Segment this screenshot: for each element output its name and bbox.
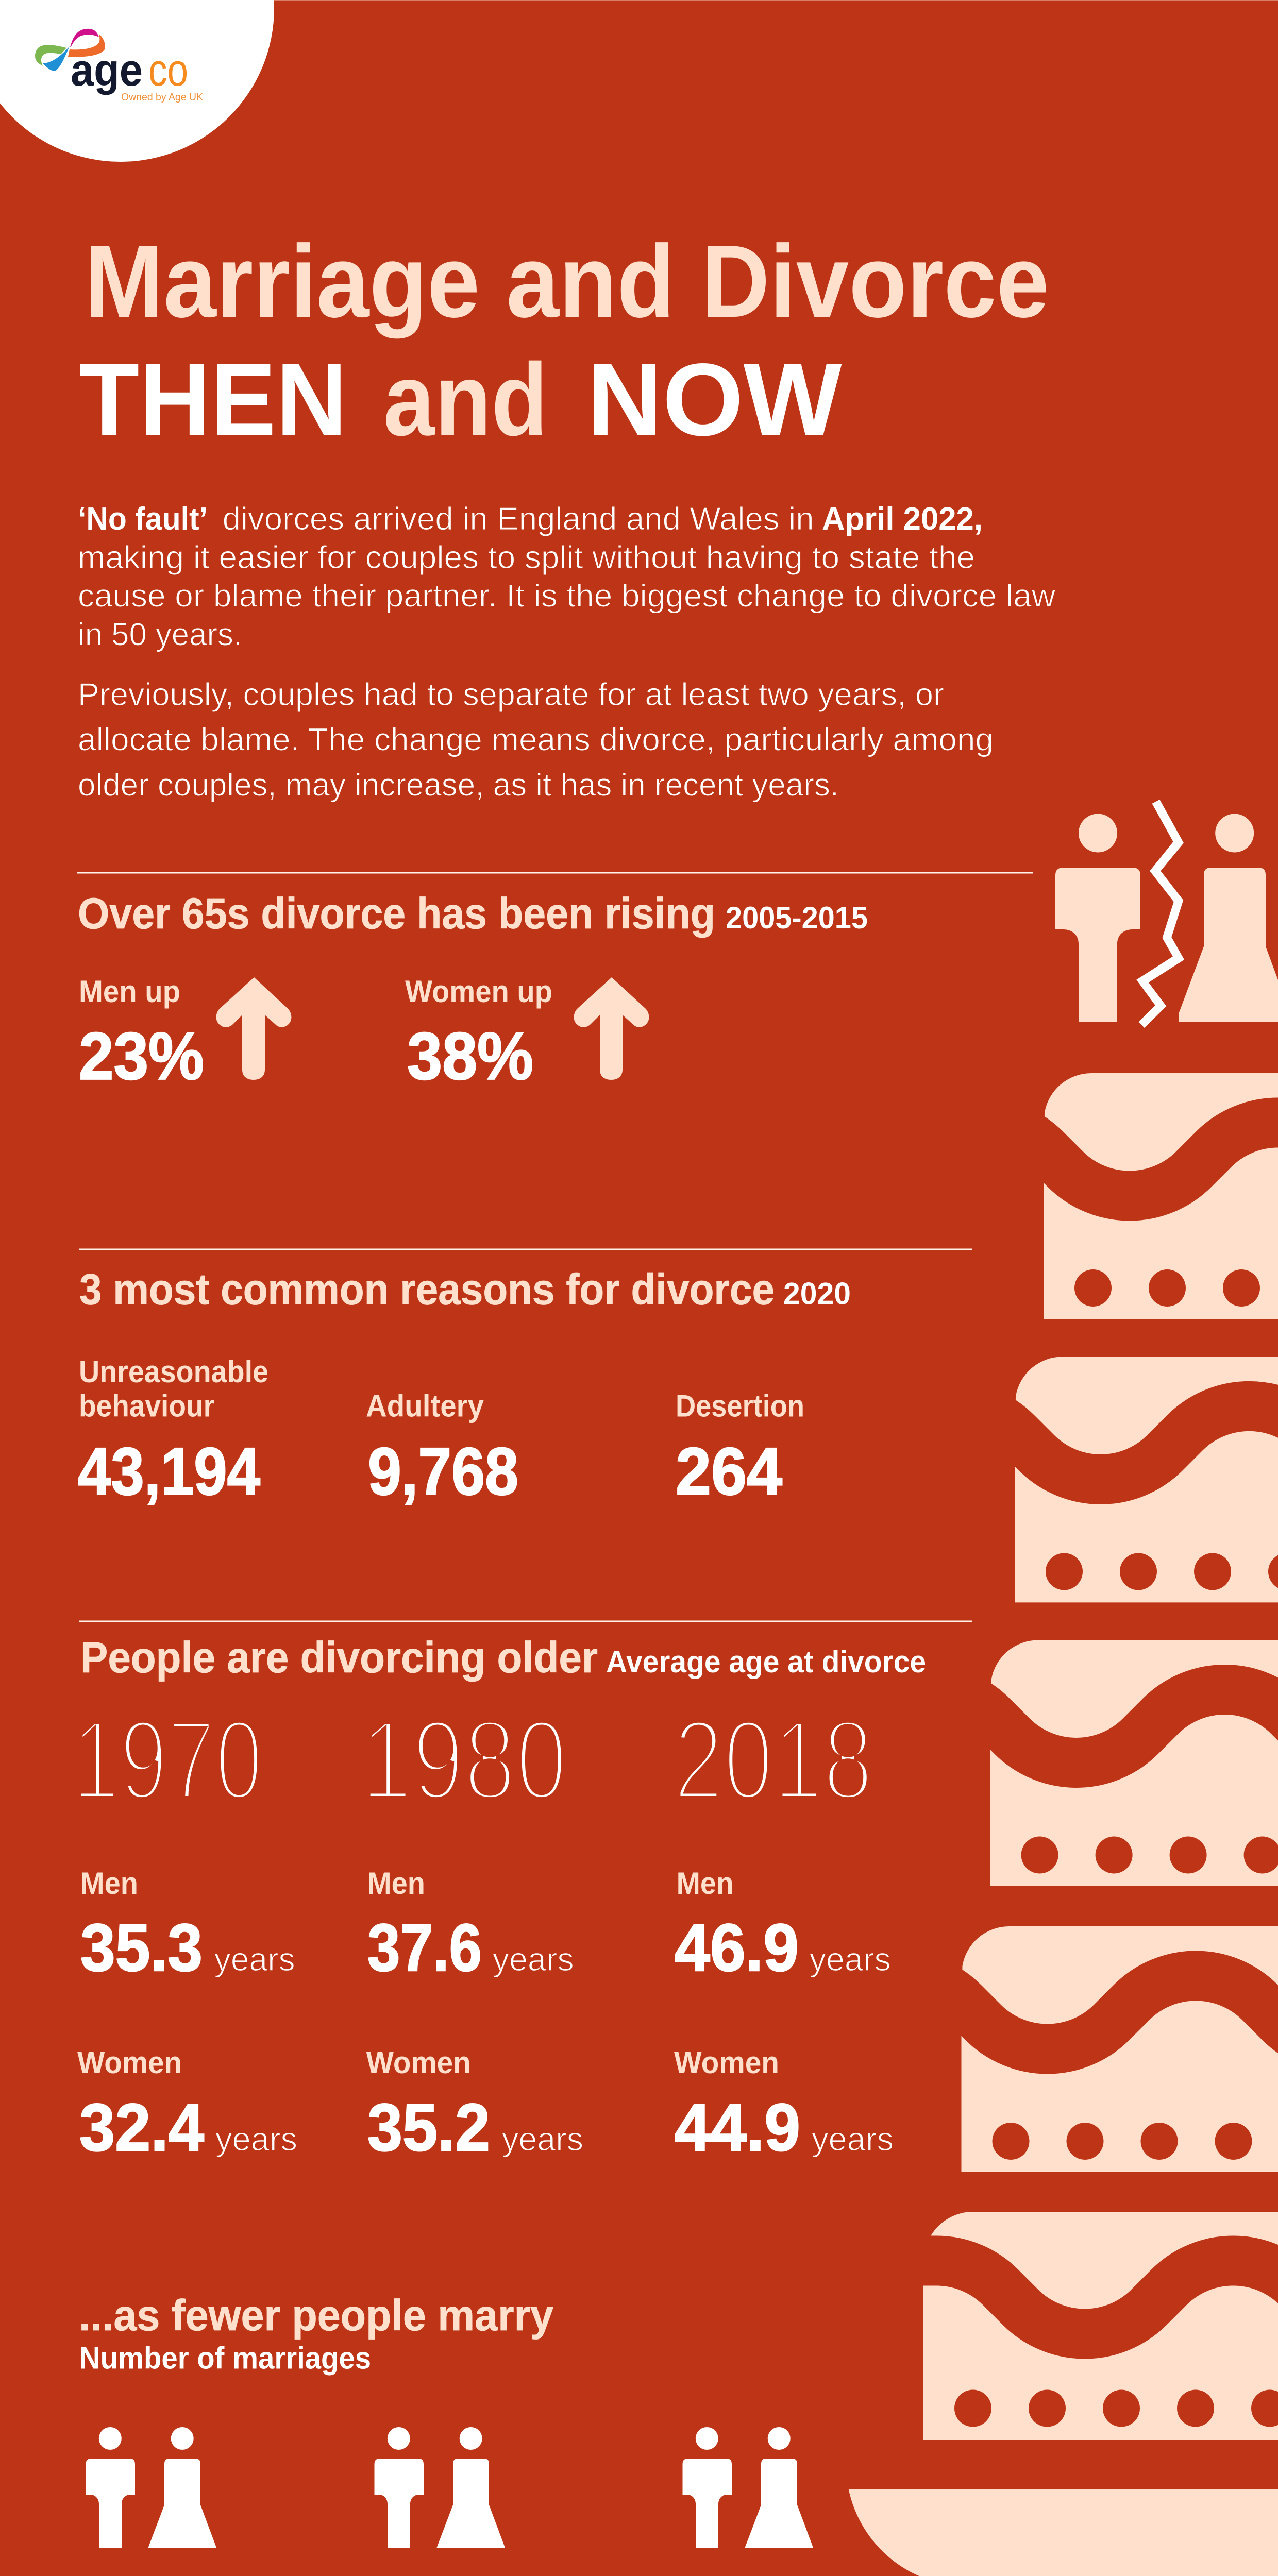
column: 1970: years — [214, 1941, 295, 1978]
intro text: no fault divorces: in 50 years. — [78, 617, 242, 652]
stat: desertion — [676, 1389, 804, 1509]
stat: adultery — [366, 1389, 518, 1509]
stat: adultery: 9,768 — [368, 1434, 518, 1509]
stat: unreasonable behaviour: behaviour — [79, 1389, 214, 1423]
intro text: no fault divorces: cause or blame their partner. It is the biggest change to divorce law — [78, 578, 1055, 614]
stat: desertion: 264 — [676, 1434, 782, 1509]
icon: woman — [1179, 814, 1278, 1022]
arrow up: men — [216, 977, 291, 1080]
column: 2018: 2018 — [674, 1696, 873, 1823]
panel: over 65s divorce rising — [78, 889, 868, 1094]
column: 2018: years — [812, 2121, 894, 2158]
column: 2018: Men — [677, 1866, 734, 1901]
column: 1970 — [72, 1696, 297, 2165]
intro text: no fault divorces: divorces arrived in England and Wales in — [223, 501, 814, 537]
column: 1970: 32.4 — [79, 2090, 204, 2165]
stat: women up 38%: 38% — [407, 1019, 533, 1094]
couple icon and 415,000 — [78, 2427, 303, 2576]
icon: multicoloured ribbon loop — [35, 29, 105, 71]
heading: ...as fewer people marry — [79, 2291, 553, 2340]
cake tier 5 — [923, 2212, 1278, 2440]
illustration: wedding cake tiers — [849, 1073, 1278, 2576]
logo: AgeCo on white circle — [0, 0, 274, 162]
panel: average age at divorce — [72, 1633, 926, 2165]
column: 2018: Women — [674, 2045, 779, 2080]
column: 1970: 35.3 — [80, 1910, 203, 1985]
column: 1970: Men — [80, 1866, 138, 1901]
column: 1980: 37.6 — [367, 1910, 482, 1985]
column: 2018 — [674, 1696, 894, 2165]
intro text: previous law: older couples, may increase, as it has in recent years. — [78, 768, 839, 803]
column: 1980 — [361, 1696, 583, 2165]
couple icon and 370,000 — [368, 2427, 600, 2576]
title: THEN — [79, 343, 347, 457]
intro text: no fault divorces: April 2022, — [822, 501, 983, 537]
heading: 2005-2015 — [726, 901, 868, 935]
column: 1970: years — [215, 2121, 297, 2158]
column: 2018: years — [810, 1941, 891, 1978]
column: 1970: Women — [77, 2045, 182, 2080]
stat: men up 23%: Men up — [79, 974, 180, 1009]
column: 2018: 46.9 — [675, 1910, 799, 1985]
heading: 2020 — [783, 1277, 851, 1311]
logo: AgeCo on white circle: Owned by Age UK — [121, 92, 204, 103]
illustration: separating couple with crack — [1055, 800, 1278, 1028]
title: Marriage and Divorce — [85, 224, 1049, 339]
column: 1980: years — [502, 2121, 583, 2158]
intro text: previous law: allocate blame. The change means divorce, particularly among — [78, 722, 994, 758]
title: and — [383, 343, 548, 457]
icon: man — [1055, 814, 1140, 1022]
stat: unreasonable behaviour: Unreasonable — [79, 1354, 268, 1389]
intro text: previous law — [78, 677, 994, 803]
heading: Over 65s divorce has been rising — [78, 889, 715, 938]
heading — [79, 2291, 553, 2376]
intro text: previous law: Previously, couples had to separate for at least two years, or — [78, 677, 944, 713]
column: 2018: 44.9 — [675, 2090, 800, 2165]
column: 1970: 1970 — [72, 1696, 263, 1823]
heading: 3 most common reasons for divorce — [79, 1265, 775, 1314]
column: 1980: 35.2 — [367, 2090, 490, 2165]
couple icon and 235,000 — [677, 2427, 911, 2576]
title — [79, 224, 1049, 457]
panel: reasons for divorce — [78, 1265, 851, 1509]
heading: Number of marriages — [79, 2341, 371, 2376]
column: 1980: Men — [367, 1866, 425, 1901]
cake tier 2 — [1015, 1357, 1278, 1602]
heading: Average age at divorce — [606, 1645, 926, 1679]
stat: women up 38% — [405, 974, 649, 1094]
cake tier 1 — [1044, 1073, 1278, 1319]
cake tier 3 — [990, 1640, 1278, 1886]
stat: desertion: Desertion — [676, 1389, 804, 1423]
logo: AgeCo on white circle: co — [148, 44, 188, 95]
panel: number of marriages — [78, 2291, 911, 2576]
title: NOW — [587, 343, 842, 457]
stat: men up 23%: 23% — [79, 1019, 204, 1094]
intro text: no fault divorces: ‘No fault’ — [78, 501, 208, 537]
heading — [80, 1633, 926, 1682]
stat: men up 23% — [79, 974, 291, 1094]
column: 1980: years — [493, 1941, 574, 1978]
logo: AgeCo on white circle: age — [71, 44, 143, 95]
stat: unreasonable behaviour — [78, 1354, 268, 1509]
column: 1980: Women — [366, 2045, 471, 2080]
intro text: no fault divorces: making it easier for couples to split without having to state the — [78, 540, 975, 575]
cake base: bowl — [849, 2489, 1278, 2576]
intro text: no fault divorces — [78, 501, 1055, 652]
cake tier 4 — [962, 1926, 1278, 2172]
stat: women up 38%: Women up — [405, 974, 552, 1009]
stat: unreasonable behaviour: 43,194 — [78, 1434, 260, 1509]
stat: adultery: Adultery — [366, 1389, 484, 1423]
column: 1980: 1980 — [361, 1696, 567, 1823]
heading: People are divorcing older — [80, 1633, 598, 1682]
arrow up: women — [574, 977, 649, 1080]
icon: crack zigzag — [1136, 800, 1184, 1028]
